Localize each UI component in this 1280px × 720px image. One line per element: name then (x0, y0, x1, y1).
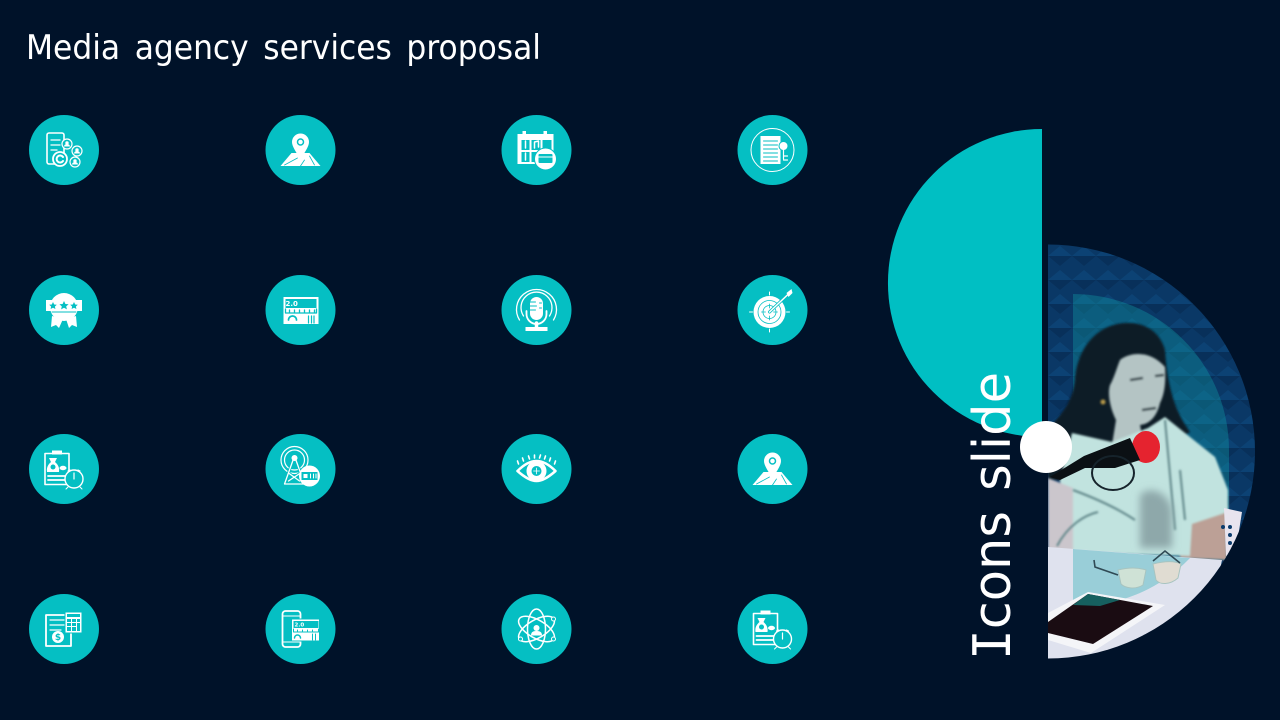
icon: phone with dashboard: 2.0 (294, 622, 304, 628)
fur detail (1140, 490, 1172, 548)
face and neck (1100, 354, 1165, 445)
icon: target with arrow (738, 275, 808, 345)
icon: eye (502, 434, 572, 504)
icon grid (29, 115, 808, 664)
icon: map pin (266, 115, 336, 185)
title: Media agency services proposal (26, 28, 541, 68)
table teal tint (1073, 549, 1190, 600)
tablet (1048, 592, 1165, 653)
icon: budget clipboard with clock (738, 594, 808, 664)
icon: atom with person (502, 594, 572, 664)
bare arm (1180, 505, 1227, 560)
icon: budget clipboard with clock (29, 434, 99, 504)
icon: broadcast tower with card (266, 434, 336, 504)
icon: phone with dashboard (266, 594, 336, 664)
icon: invoice with calculator: $ (55, 633, 61, 643)
acoustic foam wall (1048, 244, 1258, 574)
left sleeve (1048, 478, 1073, 552)
microphone (1050, 431, 1160, 490)
icon: document with users (29, 115, 99, 185)
icon: dashboard 2.0 (266, 275, 336, 345)
chair with dots (1221, 508, 1242, 556)
teal half circle (888, 129, 1042, 437)
vertical heading: Icons slide (963, 372, 1023, 660)
icon: map pin (738, 434, 808, 504)
teal inner quarter overlay (1073, 294, 1229, 560)
photo half circle: podcast host at microphone (1048, 244, 1258, 670)
icon: microphone (502, 275, 572, 345)
icon: calendar with card (502, 115, 572, 185)
shawl folds (1057, 420, 1185, 546)
icon: notebook with key (738, 115, 808, 185)
woman's hair (1048, 323, 1190, 480)
icon: dashboard 2.0: 2.0 (286, 300, 298, 308)
icon: invoice with calculator (29, 594, 99, 664)
white circle (1020, 421, 1072, 473)
table (1048, 547, 1222, 670)
glasses (1094, 551, 1181, 588)
shawl and blouse (1060, 417, 1228, 556)
icon: award badge (29, 275, 99, 345)
